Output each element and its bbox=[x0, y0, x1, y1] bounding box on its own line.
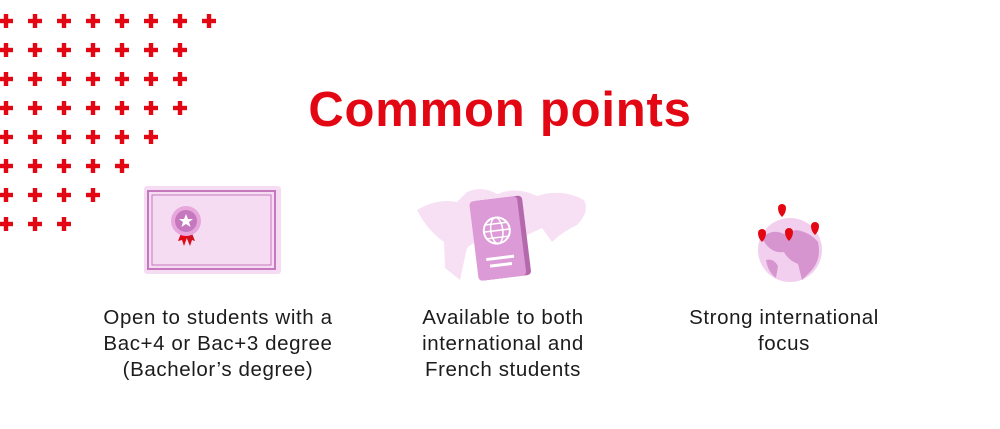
text: availability: French students bbox=[425, 358, 581, 381]
text: degree requirement: Bac+4 or Bac+3 degree bbox=[103, 332, 333, 355]
text: degree requirement bbox=[103, 306, 333, 381]
text: degree requirement: (Bachelor’s degree) bbox=[123, 358, 313, 381]
text: international focus: focus bbox=[758, 332, 810, 355]
title: Common points bbox=[308, 83, 692, 137]
icon: globe with pins bbox=[758, 204, 822, 282]
decorative plus pattern bbox=[0, 14, 216, 231]
icon: certificate bbox=[144, 186, 281, 274]
text: availability: international and bbox=[422, 332, 584, 355]
text: international focus bbox=[689, 306, 879, 355]
text: availability: Available to both bbox=[422, 306, 584, 329]
text: degree requirement: Open to students with a bbox=[103, 306, 333, 329]
text: international focus: Strong international bbox=[689, 306, 879, 329]
text: availability bbox=[422, 306, 584, 381]
icon: passport over world map bbox=[417, 189, 586, 281]
